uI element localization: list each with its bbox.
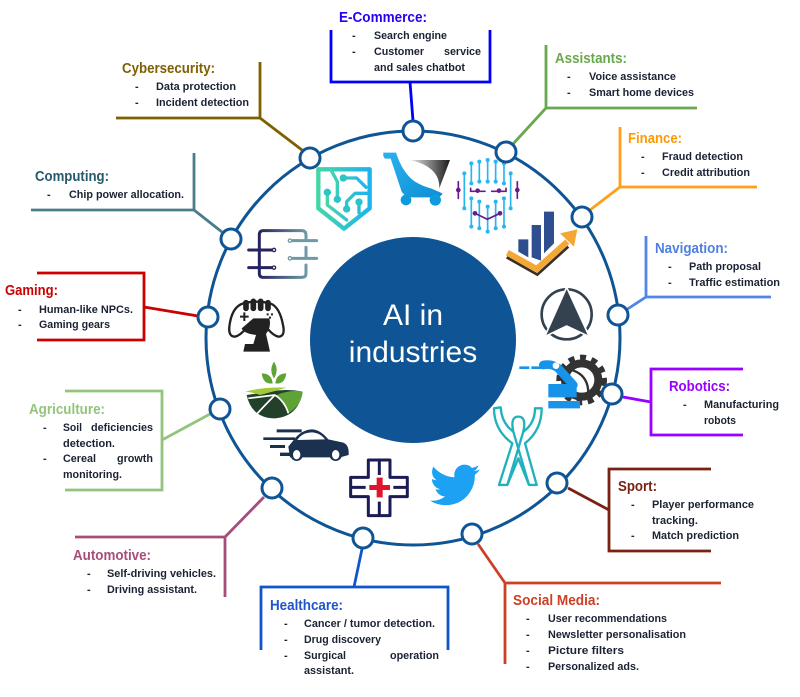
panel: gaming: - [18, 319, 22, 331]
panel: finance: Fraud detection [662, 151, 743, 163]
panel: e-commerce: E-Commerce: [339, 10, 427, 26]
icon: AI face [456, 158, 520, 234]
panel: automotive: Automotive: [73, 548, 151, 564]
panel: agriculture [29, 391, 210, 490]
panel: navigation: Traffic estimation [689, 277, 780, 289]
panel: healthcare: assistant. [304, 665, 354, 677]
panel: assistants: Voice assistance [589, 71, 676, 83]
panel: cybersecurity: - [135, 81, 139, 93]
panel: healthcare: - [284, 634, 288, 646]
center circle title [310, 237, 516, 443]
panel: agriculture: deficiencies [91, 422, 153, 434]
icon: cyber shield [318, 169, 370, 229]
panel: cybersecurity: Incident detection [156, 97, 249, 109]
panel: e-commerce: Search engine [374, 30, 447, 42]
icon: robot arm and gear [519, 357, 604, 408]
panel: navigation: Path proposal [689, 261, 761, 273]
panel: social media: Personalized ads. [548, 661, 639, 673]
panel: finance: Credit attribution [662, 167, 750, 179]
panel: social media: - [526, 661, 530, 673]
panel: e-commerce: Customer [374, 46, 425, 58]
panel: social media: Picture filters [548, 645, 624, 657]
icon: navigation arrow [542, 287, 592, 339]
panel: cybersecurity: Data protection [156, 81, 236, 93]
panel: automotive [73, 497, 264, 597]
panel: automotive: - [87, 568, 91, 580]
icon: twitter bird [430, 465, 480, 505]
panel: assistants [513, 45, 697, 144]
panel: sport: tracking. [652, 515, 698, 527]
icon: fast car [263, 429, 349, 461]
panel: agriculture: Cereal [63, 453, 96, 465]
panel: robotics: Manufacturing [704, 399, 779, 411]
panel: computing: Chip power allocation. [69, 189, 184, 201]
panel: navigation: - [668, 277, 672, 289]
panel: gaming: Gaming: [5, 283, 58, 299]
panel: agriculture: detection. [63, 438, 115, 450]
panel: healthcare: Healthcare: [270, 598, 343, 614]
panel: social media: - [526, 629, 530, 641]
panel: agriculture: Soil [63, 422, 82, 434]
panel: assistants: - [567, 87, 571, 99]
panel: computing: Computing: [35, 169, 109, 185]
panel: agriculture: - [43, 422, 47, 434]
panel: agriculture: growth [117, 453, 153, 465]
panel: sport: - [631, 499, 635, 511]
panel: healthcare: Surgical [304, 650, 346, 662]
panel: healthcare: operation [390, 650, 439, 662]
icon: sport figure [494, 407, 542, 485]
panel: computing [31, 153, 222, 232]
panel: finance: Finance: [628, 131, 682, 147]
panel: social media: - [526, 613, 530, 625]
panel: social media: User recommendations [548, 613, 667, 625]
icon: agriculture field [245, 362, 303, 418]
panel: cybersecurity [116, 61, 302, 150]
panel: navigation: Navigation: [655, 241, 728, 257]
panel: sport: Sport: [618, 479, 657, 495]
ring with connection nodes [198, 121, 628, 548]
panel: healthcare: Cancer / tumor detection. [304, 618, 435, 630]
panel: healthcare [261, 549, 448, 677]
center circle title: AI in [383, 299, 443, 332]
panel: automotive: - [87, 584, 91, 596]
panel: sport: Match prediction [652, 530, 739, 542]
icon: chip circuit [249, 231, 317, 277]
panel: finance: - [641, 151, 645, 163]
panel: assistants: Assistants: [555, 51, 627, 67]
panel: agriculture: monitoring. [63, 469, 122, 481]
panel: social media [478, 544, 721, 673]
panel: robotics [623, 369, 779, 435]
panel: robotics: Robotics: [669, 379, 730, 395]
panel: gaming: Human-like NPCs. [39, 304, 133, 316]
icon: finance chart [507, 212, 577, 275]
panel: gaming: Gaming gears [39, 319, 110, 331]
panel: social media: Social Media: [513, 593, 600, 609]
panel: cybersecurity: - [135, 97, 139, 109]
panel: social media: Newsletter personalisation [548, 629, 686, 641]
panel: gaming: - [18, 304, 22, 316]
panel: finance: - [641, 167, 645, 179]
icon: shopping cart [383, 153, 450, 206]
panel: robotics: - [683, 399, 687, 411]
icon: game controller [229, 301, 284, 352]
panel: automotive: Driving assistant. [107, 584, 197, 596]
icon: medical cross [351, 460, 407, 516]
panel: computing: - [47, 189, 51, 201]
panel: social media: - [526, 645, 530, 657]
panel: sport [568, 469, 754, 551]
panel: robotics: robots [704, 415, 736, 427]
panel: healthcare: - [284, 650, 288, 662]
panel: automotive: Self-driving vehicles. [107, 568, 216, 580]
panel: finance [590, 127, 757, 210]
panel: e-commerce: service [444, 46, 481, 58]
panel: healthcare: - [284, 618, 288, 630]
panel: e-commerce: and sales chatbot [374, 62, 465, 74]
panel: healthcare: Drug discovery [304, 634, 382, 646]
panel: e-commerce [331, 10, 490, 121]
panel: assistants: - [567, 71, 571, 83]
panel: agriculture: - [43, 453, 47, 465]
panel: sport: - [631, 530, 635, 542]
panel: navigation [626, 236, 780, 310]
panel: gaming [5, 273, 198, 340]
panel: navigation: - [668, 261, 672, 273]
panel: e-commerce: - [352, 30, 356, 42]
panel: cybersecurity: Cybersecurity: [122, 61, 215, 77]
panel: sport: Player performance [652, 499, 754, 511]
panel: e-commerce: - [352, 46, 356, 58]
center circle title: industries [349, 336, 477, 369]
panel: assistants: Smart home devices [589, 87, 694, 99]
panel: agriculture: Agriculture: [29, 402, 105, 418]
